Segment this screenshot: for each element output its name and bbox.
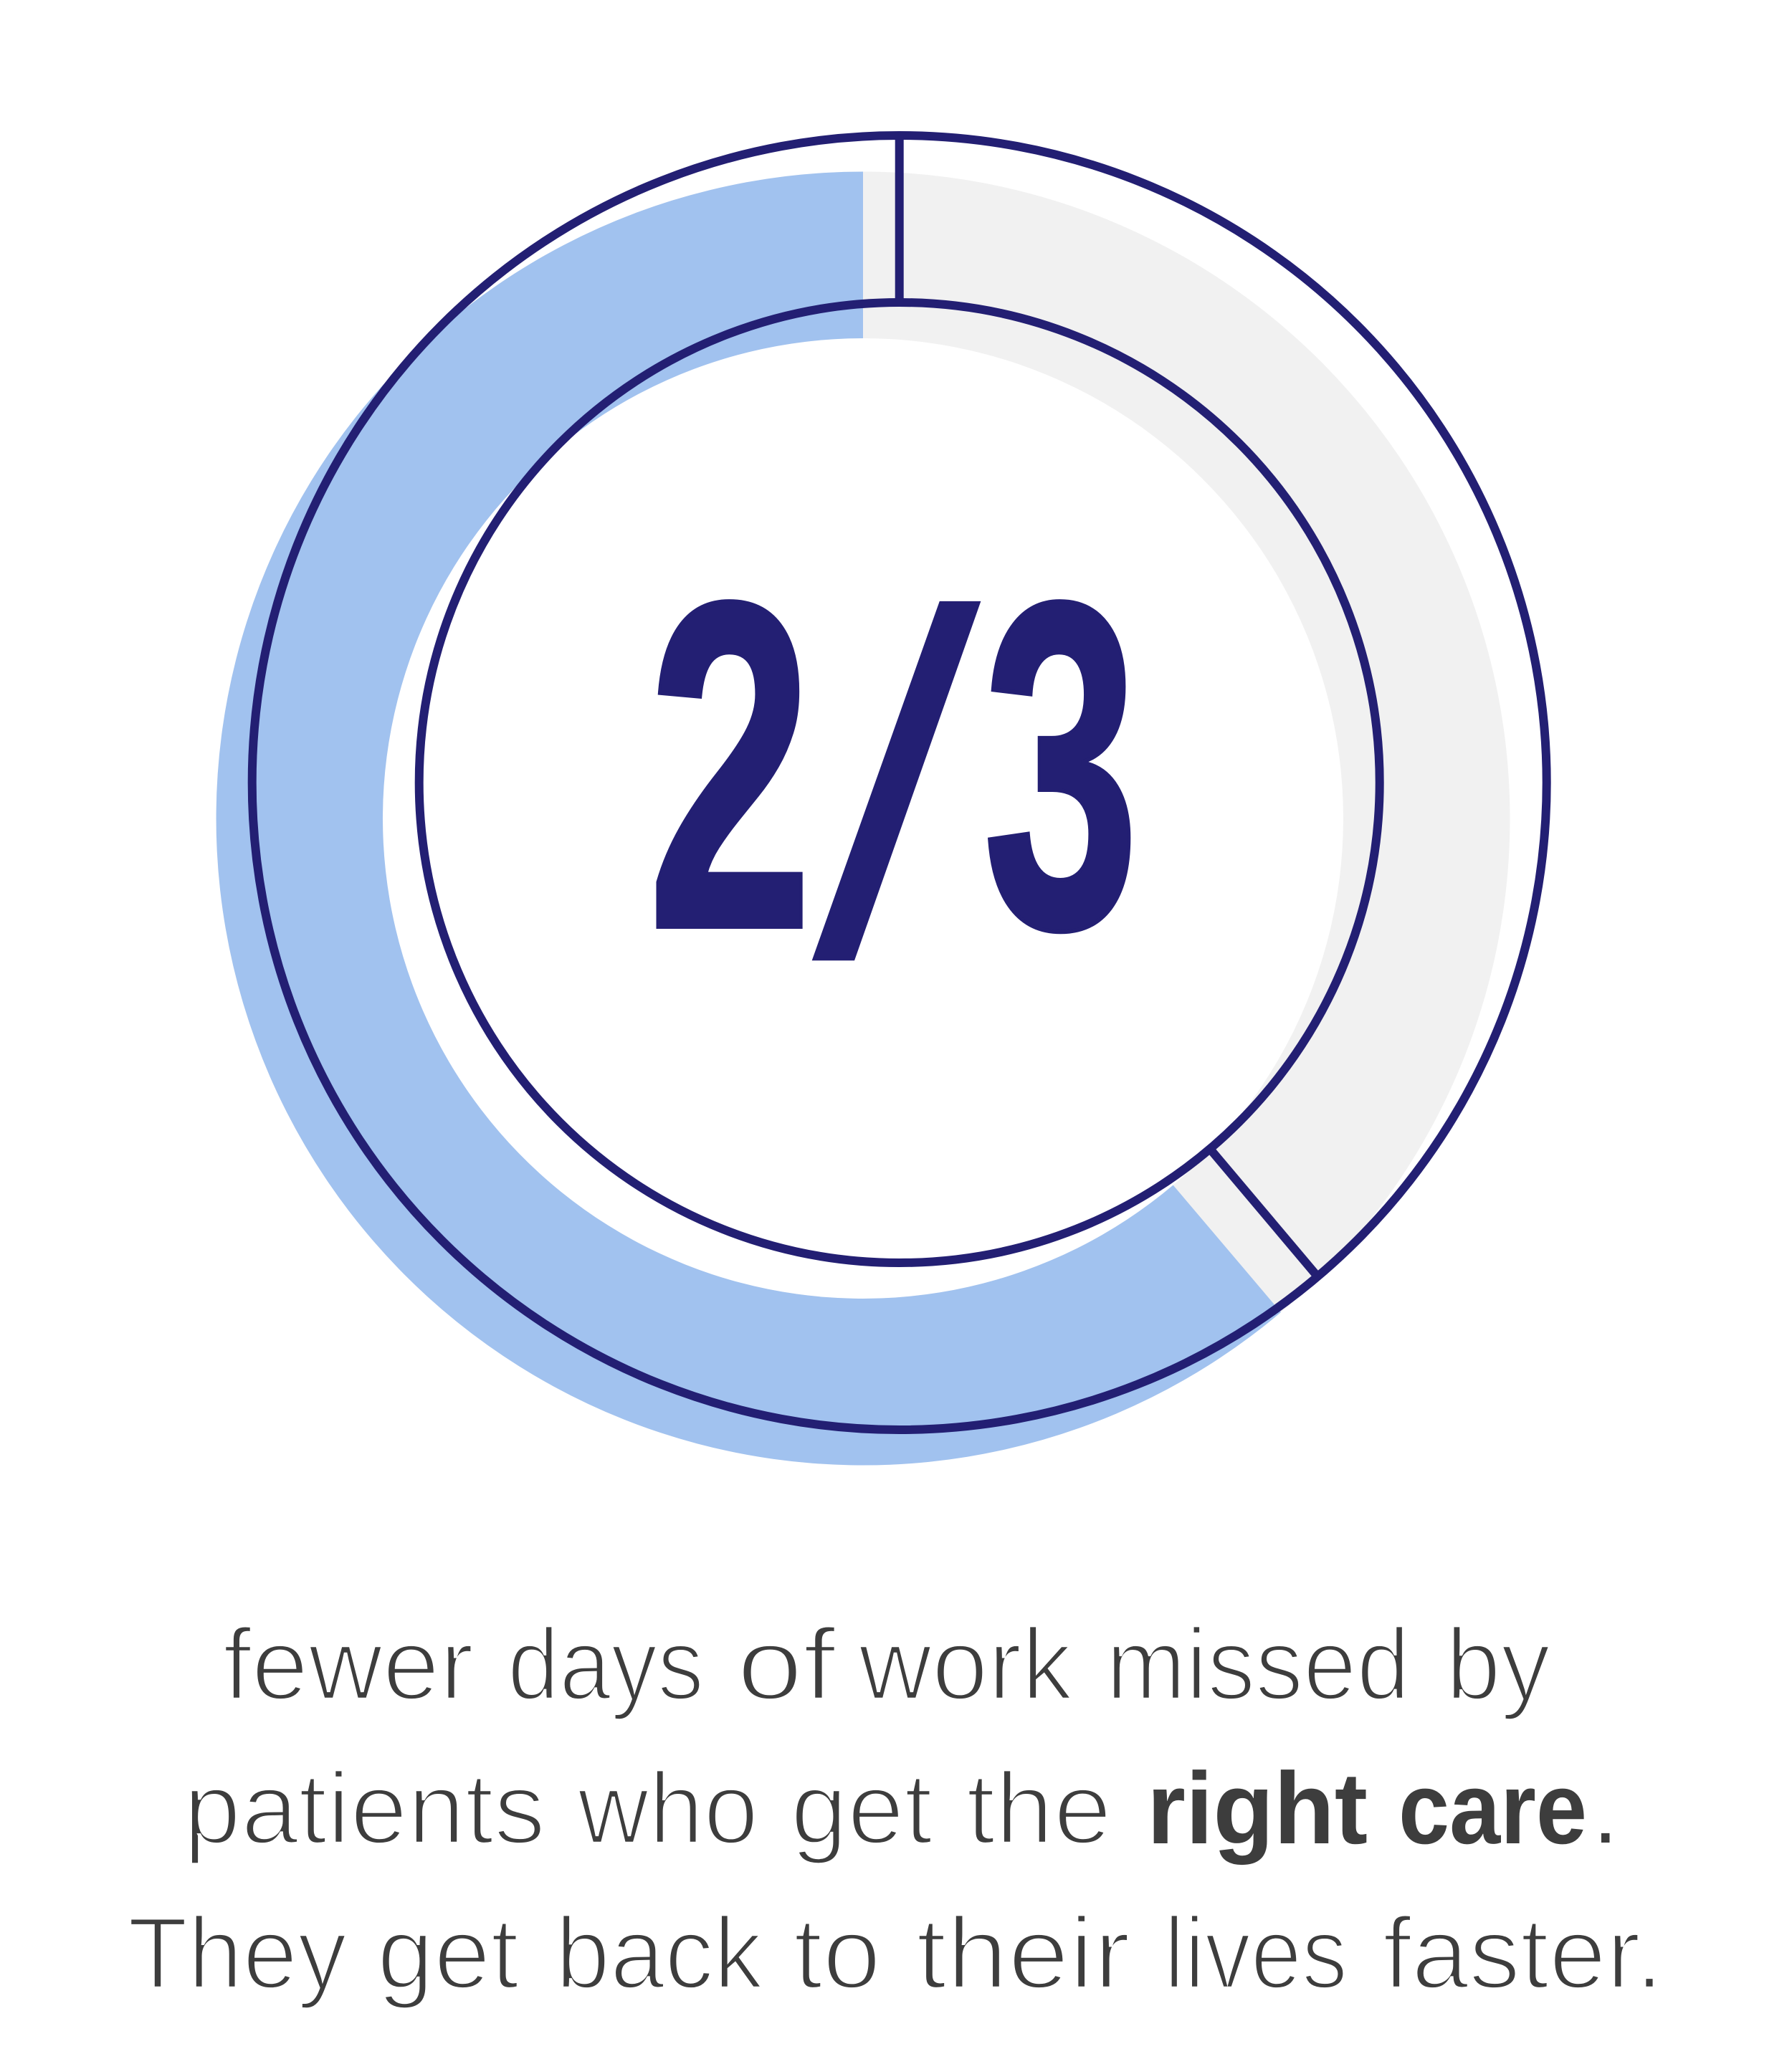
lower divider	[1210, 1149, 1317, 1276]
donut chart	[216, 135, 1547, 1466]
big fraction 2/3	[647, 505, 1140, 1064]
caption line 2: patients	[184, 1752, 545, 1866]
caption text	[128, 1608, 1664, 2010]
caption line 3: They	[128, 1896, 347, 2010]
blue two-thirds ring segment	[216, 172, 1281, 1466]
caption line 2: right	[1147, 1752, 1368, 1866]
caption line 3	[128, 1896, 1664, 2010]
caption line 2: get	[791, 1752, 933, 1866]
caption line 2: who	[577, 1752, 758, 1866]
caption line 2: .	[1591, 1752, 1619, 1866]
caption line 1: fewer	[223, 1608, 474, 1721]
caption line 2: care	[1398, 1752, 1587, 1866]
caption line 1: missed	[1106, 1608, 1410, 1721]
caption line 3: get	[377, 1896, 519, 2010]
inner ring outline	[419, 302, 1380, 1263]
caption line 3: to	[793, 1896, 881, 2010]
caption line 1: by	[1446, 1608, 1550, 1721]
caption line 2: the	[966, 1752, 1112, 1866]
top divider	[895, 135, 904, 302]
caption line 1: work	[858, 1608, 1073, 1721]
big fraction 2/3: 3	[983, 505, 1140, 1026]
caption line 1: days	[507, 1608, 704, 1721]
caption line 3: faster.	[1383, 1896, 1664, 2010]
caption line 3: their	[916, 1896, 1130, 2010]
grey remainder ring	[216, 172, 1510, 1465]
big fraction 2/3: /	[806, 508, 988, 1064]
caption line 3: lives	[1164, 1896, 1348, 2010]
caption line 2	[184, 1752, 1619, 1866]
big fraction 2/3: 2	[647, 505, 813, 1026]
outer ring outline	[252, 135, 1547, 1430]
caption line 3: back	[556, 1896, 763, 2010]
caption line 1: of	[737, 1608, 837, 1721]
caption line 1	[223, 1608, 1550, 1721]
